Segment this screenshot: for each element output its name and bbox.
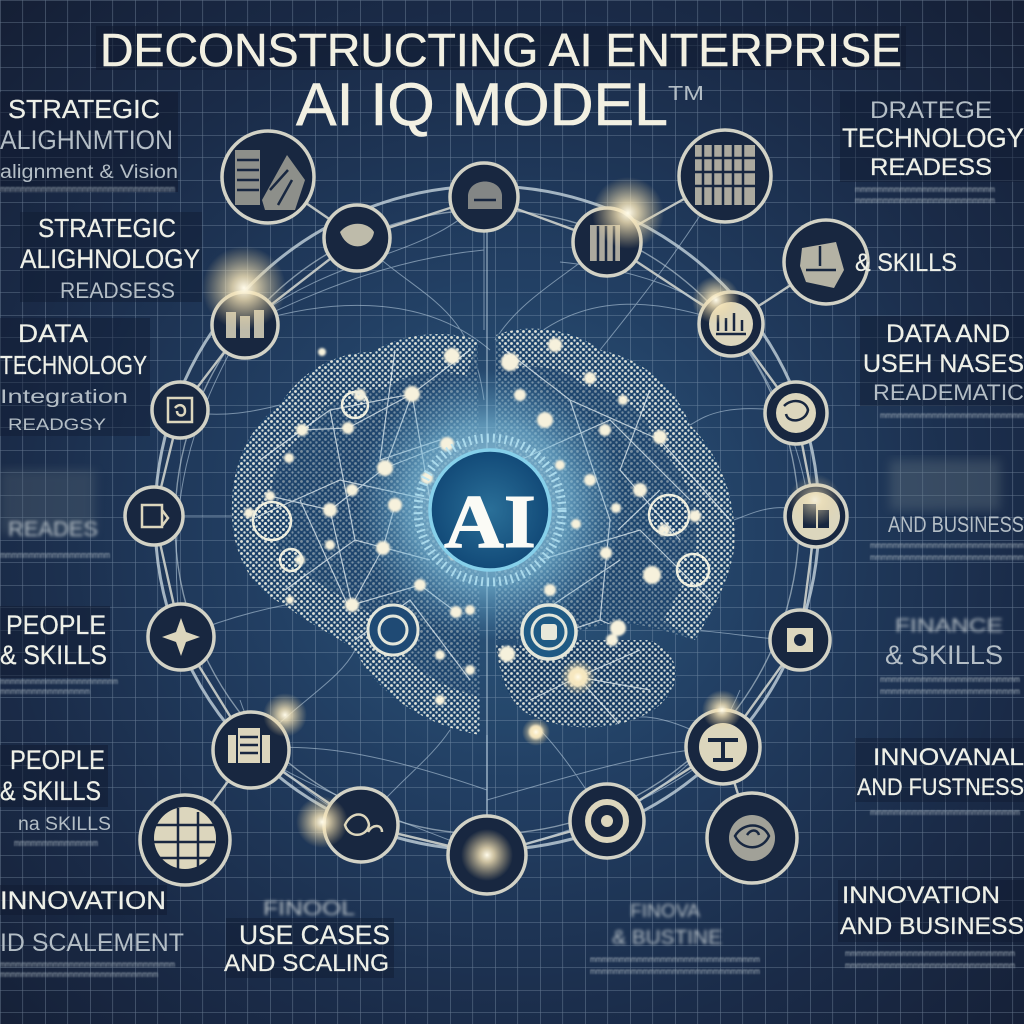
label: people and skills 1: PEOPLE <box>6 610 106 640</box>
title <box>96 24 906 138</box>
label: data technology: DATA <box>18 320 88 348</box>
node: bottom left inner <box>324 788 398 862</box>
outer ring <box>155 186 819 850</box>
label: people and skills 2: & SKILLS <box>0 776 101 806</box>
label: innovation and business 1 <box>855 738 1024 817</box>
central AI badge <box>418 438 562 582</box>
label: people and skills 1 <box>0 606 118 696</box>
node: top right large <box>679 130 771 222</box>
brain left hemisphere <box>225 325 485 745</box>
central glow <box>355 370 625 640</box>
node: lower left <box>213 712 289 788</box>
node: right 2 <box>765 382 827 444</box>
label: use cases and scaling <box>224 898 394 978</box>
connector network <box>154 176 826 860</box>
label: data technology <box>0 318 150 436</box>
label: use cases and scaling: AND SCALING <box>224 950 389 977</box>
node: upper right <box>573 208 641 276</box>
label: use cases and scaling: FINOOL <box>263 898 355 920</box>
label: technology readiness: mmmmmmmmmmmmmmmmmmmmmmmmm <box>855 196 995 205</box>
node: bottom center <box>448 816 526 894</box>
label: and business <box>870 460 1024 562</box>
brain right hemisphere <box>496 328 735 640</box>
label: finance and business: FINOVA <box>630 901 700 921</box>
node: upper left <box>324 205 390 271</box>
label: technology readiness: DRATEGE <box>870 97 992 124</box>
label: data and use cases: USEH NASES <box>863 350 1024 378</box>
label: faded readiness <box>0 470 110 560</box>
node: left 4 <box>148 604 214 670</box>
label: strategic technology <box>20 212 202 303</box>
label: finance and skills <box>880 616 1020 696</box>
label: innovation and business 1: INNOVANAL <box>873 744 1024 771</box>
title: TM <box>668 83 704 105</box>
node: bottom right large <box>707 793 797 883</box>
label: people and skills 2: mmmmmmmmmmmmmmm <box>14 838 98 848</box>
label: innovation and scaling: INNOVATION <box>0 887 166 915</box>
label: data technology: TECHNOLOGY <box>0 350 147 380</box>
label: strategic alignment: mmmmmmmmmmmmmmmmmmmmmmmmmmmmmmmmmm <box>0 184 175 194</box>
label: people and skills 2: na SKILLS <box>18 814 111 835</box>
label: finance and skills: FINANCE <box>895 616 1003 637</box>
title: AI IQ MODEL <box>296 71 668 138</box>
label: technology readiness: mmmmmmmmmmmmmmmmmmmmmmmmm <box>855 185 995 194</box>
label: people and skills 1: mmmmmmmmmmmmmmmmmmmmmmm <box>0 677 118 686</box>
node: left 1 <box>212 292 278 358</box>
label: strategic alignment: ALIGHNMTION <box>0 125 173 155</box>
brain small rings <box>253 392 709 659</box>
label: strategic technology: STRATEGIC <box>38 213 176 243</box>
brain lower lobe <box>496 640 676 728</box>
label: innovation and business 2 <box>838 880 1024 970</box>
label: strategic alignment <box>0 92 178 194</box>
glow highlights <box>202 177 841 881</box>
label: strategic technology: READSESS <box>60 278 175 303</box>
label: strategic alignment: STRATEGIC <box>8 94 160 124</box>
label: innovation and scaling: mmmmmmmmmmmmmmmmmmmmmmmmmmmmmm <box>0 970 158 979</box>
label: innovation and scaling <box>0 885 184 979</box>
label: finance and business: & BUSTINE <box>612 927 722 949</box>
label: faded readiness: mmmmmmmmmmmmmmmmmmm <box>0 550 110 560</box>
node: right 1 <box>699 292 763 356</box>
label: strategic alignment: alignment & Vision <box>0 162 178 183</box>
node: bottom left large <box>140 795 230 885</box>
node: right 4 <box>770 610 830 670</box>
node: left 3 <box>125 487 183 545</box>
title: DECONSTRUCTING AI ENTERPRISE <box>100 24 902 76</box>
node: lower right <box>686 710 760 784</box>
label: data technology: Integration <box>0 387 128 408</box>
node: right upper <box>784 220 868 304</box>
node: bottom right inner <box>570 784 644 858</box>
label: people and skills 2: PEOPLE <box>10 745 105 775</box>
label: strategic technology: ALIGHNOLOGY <box>20 244 200 274</box>
label: data and use cases: DATA AND <box>886 320 1010 348</box>
central AI badge: AI <box>444 480 536 564</box>
brain <box>225 320 740 745</box>
node: left 2 <box>152 382 208 438</box>
label: skills: & SKILLS <box>855 249 957 277</box>
label: innovation and business 2: INNOVATION <box>842 882 1000 909</box>
right labels <box>590 92 1024 976</box>
label: finance and business: mmmmmmmmmmmmmmmmmmmmmmmmmmmmm <box>590 967 760 976</box>
label: finance and skills: & SKILLS <box>885 640 1003 670</box>
label: finance and business: mmmmmmmmmmmmmmmmmmmmmmmmmmmmm <box>590 955 760 964</box>
label: innovation and business 2: AND BUSINESS <box>840 913 1024 940</box>
node: top left large <box>222 131 314 223</box>
label: faded readiness: READES <box>8 518 98 541</box>
label: technology readiness <box>840 92 1024 205</box>
label: finance and business <box>590 901 760 976</box>
node: right 3 <box>785 485 847 547</box>
node: top center <box>450 163 518 231</box>
label: innovation and scaling: ID SCALEMENT <box>0 929 184 957</box>
label: innovation and scaling: mmmmmmmmmmmmmmmmmmmmmmmmmmmmmmmmm <box>0 960 175 969</box>
label: people and skills 1: & SKILLS <box>0 640 107 670</box>
label: use cases and scaling: USE CASES <box>239 920 390 950</box>
label: people and skills 2 <box>0 745 111 848</box>
label: data and use cases <box>860 316 1024 420</box>
node icons ring <box>125 130 868 894</box>
label: data and use cases: READEMATIC <box>873 380 1024 405</box>
label: technology readiness: READESS <box>870 154 992 181</box>
brain nodes <box>244 338 701 739</box>
left labels <box>0 92 394 979</box>
label: data technology: READGSY <box>8 415 106 434</box>
label: people and skills 1: mmmmmmmmmmmmmmmmm <box>0 687 90 696</box>
